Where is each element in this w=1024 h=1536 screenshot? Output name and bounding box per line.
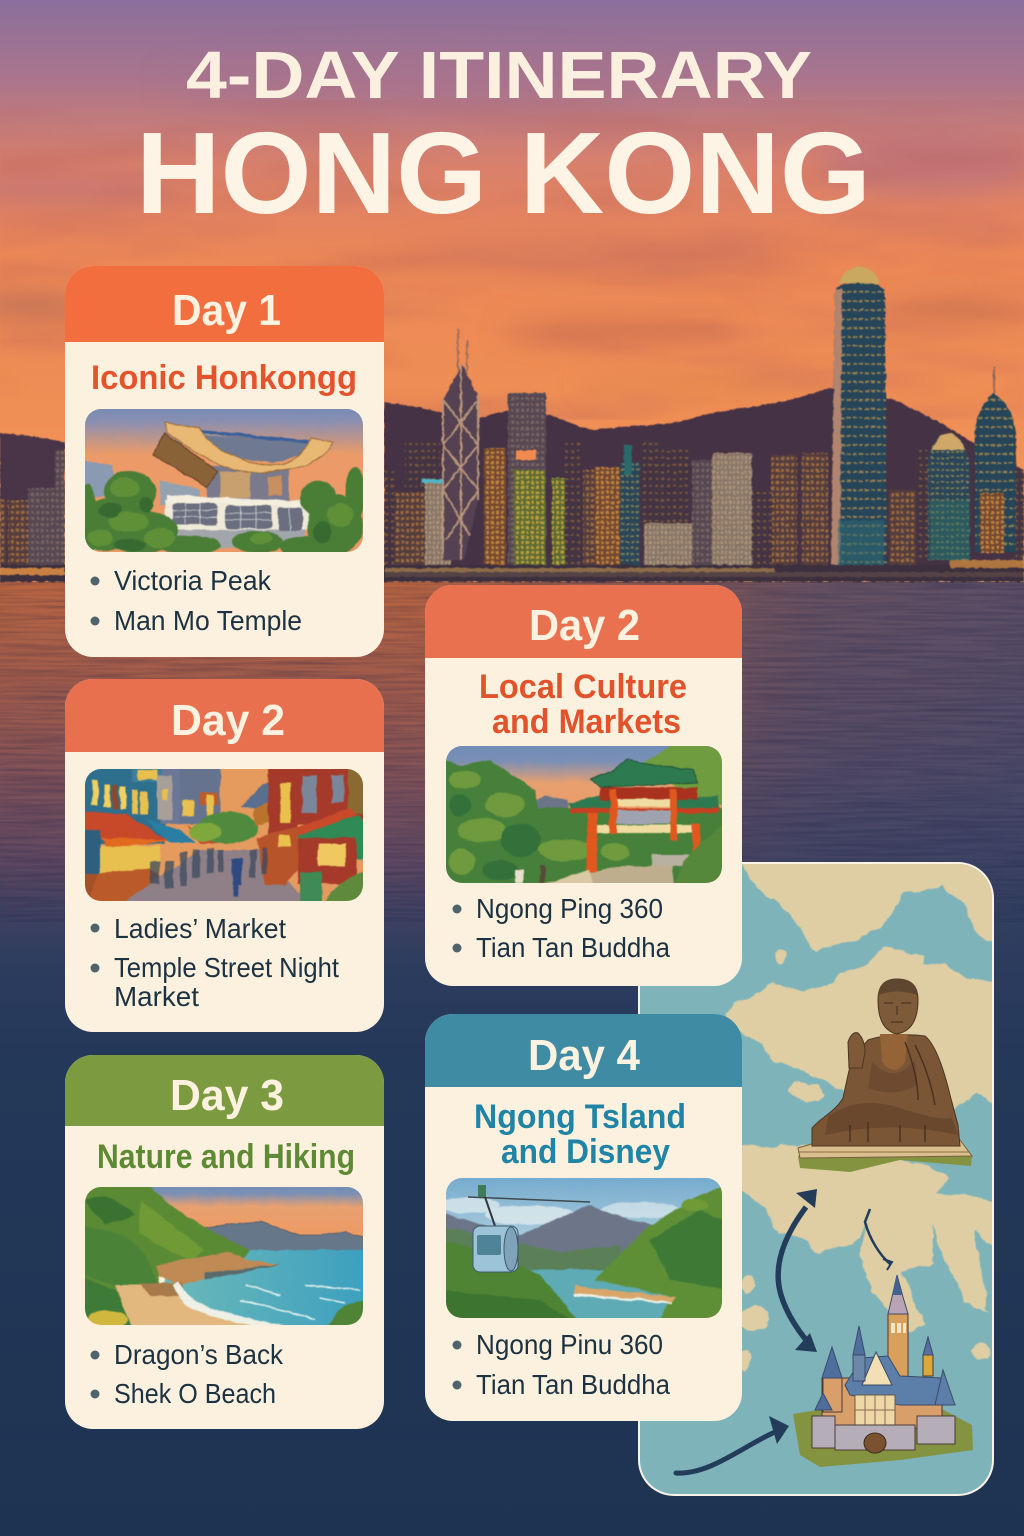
bullet list: Day 2 culture: Tian Tan Buddha: [476, 932, 670, 963]
building: Bank of China tower: [443, 328, 478, 560]
heading: Day 3: Day 3: [170, 1071, 284, 1120]
header: Day 4: [425, 1014, 742, 1087]
bullet list: Day 4: [452, 1329, 670, 1400]
arrow: to castle: [676, 1416, 789, 1473]
arrow: between Buddha and castle: [778, 1189, 817, 1352]
subtitle: Ngong Tsland and Disney: [474, 1098, 686, 1171]
header: Day 2 culture: [425, 585, 742, 658]
bullet list: Day 3: Dragon’s Back: [114, 1339, 284, 1370]
title line: 4-day itinerary: 4-DAY ITINERARY: [186, 38, 812, 113]
bullet list: Day 4: Tian Tan Buddha: [476, 1369, 670, 1400]
building: spire tower: [975, 367, 1024, 565]
bullet list: Day 2 markets: [90, 913, 339, 1012]
title line: Hong Kong: HONG KONG: [136, 108, 871, 238]
title: [136, 38, 871, 238]
heading: Day 2 culture: Day 2: [529, 601, 640, 650]
bullet list: Day 3: [90, 1339, 284, 1409]
subtitle: Local Culture and Markets: [479, 668, 687, 741]
header: Day 2: [65, 679, 384, 752]
illustration: temple gate: [446, 746, 722, 883]
background: sunset sky: [0, 0, 1024, 590]
subtitle: Nature and Hiking: Nature and Hiking: [97, 1138, 355, 1176]
panel: Day 4: [425, 1014, 742, 1421]
subtitle: Local Culture and Markets: Local Culture: [479, 668, 687, 706]
bullet list: Day 2 markets: Temple Street Night: [114, 952, 339, 983]
header: Day 3: [65, 1055, 384, 1126]
shoreline lights: [0, 560, 1024, 582]
subtitle: Iconic Honkongg: Iconic Honkongg: [91, 359, 357, 397]
header: Day 1: [65, 266, 384, 342]
bullet list: Day 3: Shek O Beach: [114, 1378, 276, 1409]
bullet list: Day 4: Ngong Pinu 360: [476, 1329, 663, 1360]
bullet list: Day 1: [90, 565, 302, 636]
panel: route map: [630, 850, 1004, 1496]
illustration: coast and beach: [85, 1187, 363, 1325]
bullet list: Day 1: Man Mo Temple: [114, 605, 302, 636]
heading: Day 4: Day 4: [528, 1031, 640, 1080]
heading: Day 1: Day 1: [172, 286, 281, 335]
panel: Day 3: [65, 1055, 384, 1429]
background: harbour water: [0, 582, 1024, 1022]
illustration: modern building and trees: [85, 409, 363, 552]
panel: Day 2 markets: [65, 679, 384, 1032]
subtitle: Ngong Tsland and Disney: and Disney: [501, 1133, 670, 1171]
bullet list: Day 2 culture: [452, 893, 670, 963]
subtitle: Ngong Tsland and Disney: Ngong Tsland: [474, 1098, 686, 1136]
icon: Tian Tan Buddha: [798, 979, 972, 1172]
map: landmasses: [725, 864, 992, 1372]
illustration: night market street: [85, 769, 363, 901]
bullet list: Day 2 markets: Ladies’ Market: [114, 913, 286, 944]
arrow: small route arrow: [865, 1209, 892, 1270]
panel: Day 2 culture: [425, 585, 742, 986]
building: International Finance Centre: [831, 267, 887, 567]
illustration: cable car and mountains: [446, 1178, 722, 1318]
subtitle: Local Culture and Markets: and Markets: [492, 703, 681, 741]
bullet list: Day 1: Victoria Peak: [114, 565, 272, 596]
heading: Day 2: Day 2: [171, 696, 285, 745]
icon: Disneyland castle: [793, 1275, 973, 1467]
building: yellow tower: [508, 393, 546, 569]
panel: Day 1: [65, 266, 384, 657]
building: domed tower: [928, 433, 970, 560]
bullet list: Day 2 culture: Ngong Ping 360: [476, 893, 663, 924]
background: city skyline: [0, 267, 1024, 582]
bullet list: Day 2 markets: Market: [114, 981, 199, 1012]
